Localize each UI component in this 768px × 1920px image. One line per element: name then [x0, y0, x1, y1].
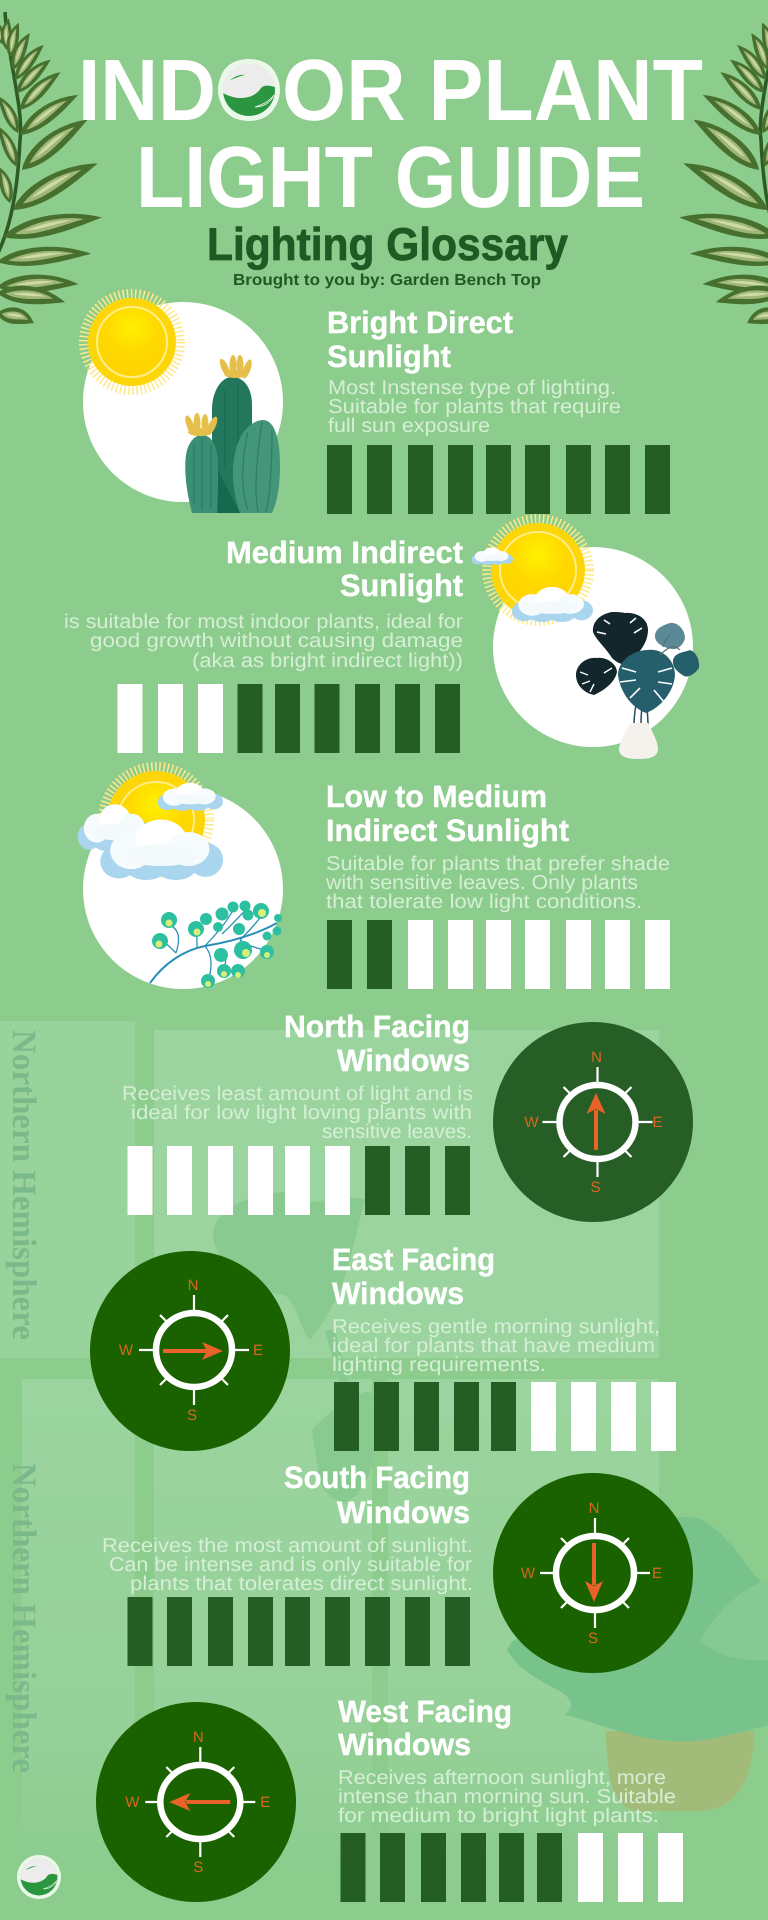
- description: good growth without causing damage: [90, 630, 463, 652]
- background: faded window panes: [0, 1021, 659, 1869]
- vertical label: Northern Hemisphere 2: Northern Hemisphere: [5, 1463, 42, 1773]
- panel: east facing windows: [90, 1242, 676, 1451]
- panel: west facing windows: [96, 1694, 683, 1902]
- description: [122, 1083, 473, 1143]
- heading: Medium Indirect: [226, 535, 463, 570]
- description: ideal for plants that have medium: [332, 1335, 655, 1357]
- heading: [284, 1460, 470, 1530]
- heading: [332, 1242, 495, 1311]
- description: Suitable for plants that prefer shade: [326, 853, 670, 875]
- compass: south: N: [589, 1500, 599, 1517]
- compass: east: S: [187, 1407, 197, 1424]
- title: IND: [78, 42, 216, 139]
- description: [102, 1535, 473, 1595]
- compass: north: E: [652, 1114, 663, 1131]
- description: [64, 611, 463, 672]
- description: [328, 377, 621, 437]
- panel: medium indirect sunlight: [64, 520, 699, 759]
- compass: south: S: [588, 1630, 598, 1647]
- compass: south: [493, 1473, 693, 1673]
- compass: south: E: [652, 1565, 662, 1582]
- panel: low to medium indirect sunlight: [78, 768, 670, 989]
- description: Receives the most amount of sunlight.: [102, 1535, 473, 1557]
- description: sensitive leaves.: [322, 1121, 472, 1143]
- description: ideal for low light loving plants with: [131, 1102, 472, 1124]
- description: lighting requirements.: [332, 1354, 546, 1376]
- vertical label: Northern Hemisphere: Northern Hemisphere: [5, 1030, 42, 1340]
- subtitle: Lighting Glossary: Lighting Glossary: [207, 218, 568, 270]
- description: Receives gentle morning sunlight,: [332, 1316, 660, 1338]
- illustration: sun, clouds and monstera: [471, 520, 699, 759]
- illustration: clouded sun and fern: [78, 768, 283, 989]
- compass: east: [90, 1251, 290, 1451]
- title: O: [215, 42, 283, 139]
- background: faded plant centre: [213, 1192, 375, 1502]
- description: full sun exposure: [328, 415, 490, 437]
- compass: north: [493, 1022, 693, 1222]
- compass: north: W: [524, 1114, 539, 1131]
- light meter: 9 of 9: [327, 445, 670, 514]
- heading: [226, 535, 463, 603]
- compass: west: S: [193, 1859, 203, 1876]
- heading: Bright Direct: [327, 305, 513, 340]
- description: is suitable for most indoor plants, ideal for: [64, 611, 463, 633]
- compass: west: E: [260, 1794, 270, 1811]
- compass: west: N: [193, 1729, 204, 1746]
- compass: north: S: [590, 1179, 601, 1196]
- description: that tolerate low light conditions.: [326, 891, 642, 913]
- heading: Low to Medium: [326, 779, 547, 814]
- heading: Windows: [337, 1043, 470, 1078]
- compass: east: E: [253, 1342, 263, 1359]
- heading: Windows: [338, 1727, 471, 1762]
- description: [325, 853, 670, 913]
- description: for medium to bright light plants.: [338, 1805, 659, 1827]
- byline: Brought to you by: Garden Bench Top: [233, 272, 541, 289]
- heading: Indirect Sunlight: [326, 813, 569, 848]
- compass: north: N: [591, 1049, 602, 1066]
- heading: Windows: [332, 1276, 464, 1311]
- compass: west: [96, 1702, 296, 1902]
- compass: east: W: [119, 1342, 134, 1359]
- heading: [284, 1009, 470, 1078]
- heading: South Facing: [284, 1460, 470, 1495]
- title: OR PLANT: [282, 42, 703, 139]
- panel: bright direct sunlight: [83, 295, 670, 514]
- heading: Windows: [337, 1495, 470, 1530]
- light meter: 3 of 9: [128, 1146, 470, 1215]
- description: intense than morning sun. Suitable: [338, 1786, 676, 1808]
- illustration: sun and cactus: [83, 295, 283, 513]
- light meter: 6 of 9: [340, 1833, 683, 1902]
- light meter: 6 of 9: [118, 684, 460, 753]
- heading: [338, 1694, 512, 1762]
- heading: [327, 305, 513, 374]
- heading: East Facing: [332, 1242, 495, 1277]
- heading: North Facing: [284, 1009, 470, 1044]
- description: [338, 1767, 676, 1827]
- heading: Sunlight: [327, 339, 451, 374]
- logo bottom left: [17, 1855, 61, 1899]
- palm left: [0, 12, 104, 334]
- background: faded potted plant: [507, 1517, 768, 1811]
- description: [332, 1316, 660, 1376]
- description: Suitable for plants that require: [328, 396, 621, 418]
- description: Most Instense type of lighting.: [328, 377, 616, 399]
- title: LIGHT GUIDE: [136, 129, 645, 226]
- compass: east: N: [188, 1277, 198, 1294]
- description: Receives afternoon sunlight, more: [338, 1767, 666, 1789]
- panel: north facing windows: [122, 1009, 693, 1222]
- compass: west: W: [125, 1794, 140, 1811]
- palm right: [677, 12, 768, 334]
- description: Can be intense and is only suitable for: [109, 1554, 472, 1576]
- description: Receives least amount of light and is: [122, 1083, 473, 1105]
- panel: south facing windows: [102, 1460, 693, 1673]
- title: [78, 42, 703, 226]
- description: (aka as bright indirect light)): [192, 650, 463, 672]
- heading: [326, 779, 569, 848]
- description: with sensitive leaves. Only plants: [325, 872, 638, 894]
- light meter: 9 of 9: [128, 1597, 470, 1666]
- description: plants that tolerates direct sunlight.: [130, 1573, 473, 1595]
- heading: Sunlight: [340, 568, 463, 603]
- light meter: 5 of 9: [334, 1382, 676, 1451]
- compass: south: W: [521, 1565, 536, 1582]
- heading: West Facing: [338, 1694, 512, 1729]
- light meter: 2 of 9: [327, 920, 670, 989]
- logo in title: [218, 59, 280, 121]
